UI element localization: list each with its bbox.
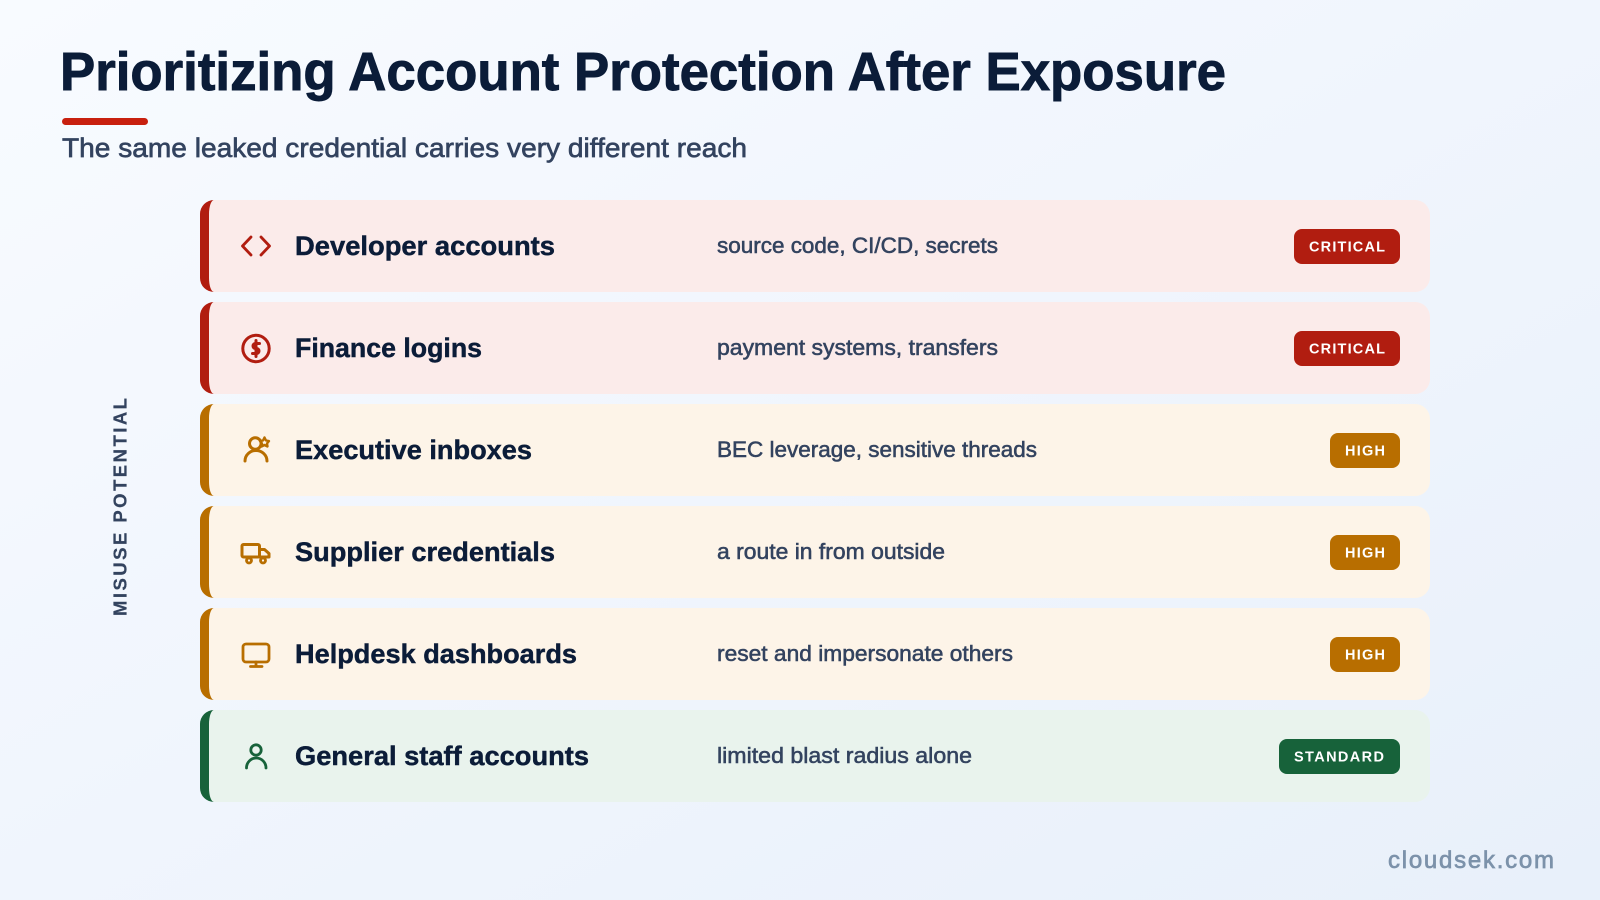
row title: developer accounts: Developer accounts (295, 231, 555, 261)
icon: code brackets (242, 237, 270, 255)
row: helpdesk dashboards (200, 608, 1430, 700)
badge: high: HIGH (1345, 546, 1385, 562)
row description: supplier credentials: a route in from outside (717, 539, 945, 564)
row: executive inboxes (200, 404, 1430, 496)
row description: finance logins: payment systems, transfers (717, 335, 998, 360)
title accent bar (62, 118, 148, 125)
row title: executive inboxes: Executive inboxes (295, 435, 532, 465)
row description: helpdesk dashboards: reset and impersonate others (717, 641, 1013, 666)
icon: dollar coin (243, 335, 269, 362)
badge: high (1330, 637, 1400, 672)
subtitle: The same leaked credential carries very different reach (62, 133, 747, 163)
row title: supplier credentials: Supplier credentials (295, 537, 555, 567)
row title: finance logins: Finance logins (295, 333, 482, 363)
badge: critical: CRITICAL (1309, 240, 1385, 256)
row: general staff accounts (200, 710, 1430, 802)
icon: monitor (243, 644, 269, 666)
badge: critical: CRITICAL (1309, 342, 1385, 358)
row title: helpdesk dashboards: Helpdesk dashboards (295, 639, 577, 669)
badge: critical (1294, 331, 1400, 366)
row: supplier credentials (200, 506, 1430, 598)
row title: general staff accounts: General staff accounts (295, 741, 589, 771)
badge: high (1330, 433, 1400, 468)
badge: high (1330, 535, 1400, 570)
source credit: cloudsek.com (1388, 847, 1554, 874)
badge: standard (1279, 739, 1400, 774)
badge: standard: STANDARD (1294, 750, 1384, 766)
badge: high: HIGH (1345, 648, 1385, 664)
axis label: misuse potential: MISUSE POTENTIAL (110, 398, 130, 616)
icon: person with star (245, 438, 269, 461)
icon: truck (242, 544, 269, 563)
icon: person (246, 745, 266, 768)
badge: high: HIGH (1345, 444, 1385, 460)
row description: developer accounts: source code, CI/CD, secrets (717, 233, 998, 258)
row: developer accounts (200, 200, 1430, 292)
row: finance logins (200, 302, 1430, 394)
row description: executive inboxes: BEC leverage, sensitive threads (717, 437, 1037, 462)
row description: general staff accounts: limited blast radius alone (717, 743, 972, 768)
badge: critical (1294, 229, 1400, 264)
title: Prioritizing Account Protection After Exposure (60, 42, 1226, 102)
